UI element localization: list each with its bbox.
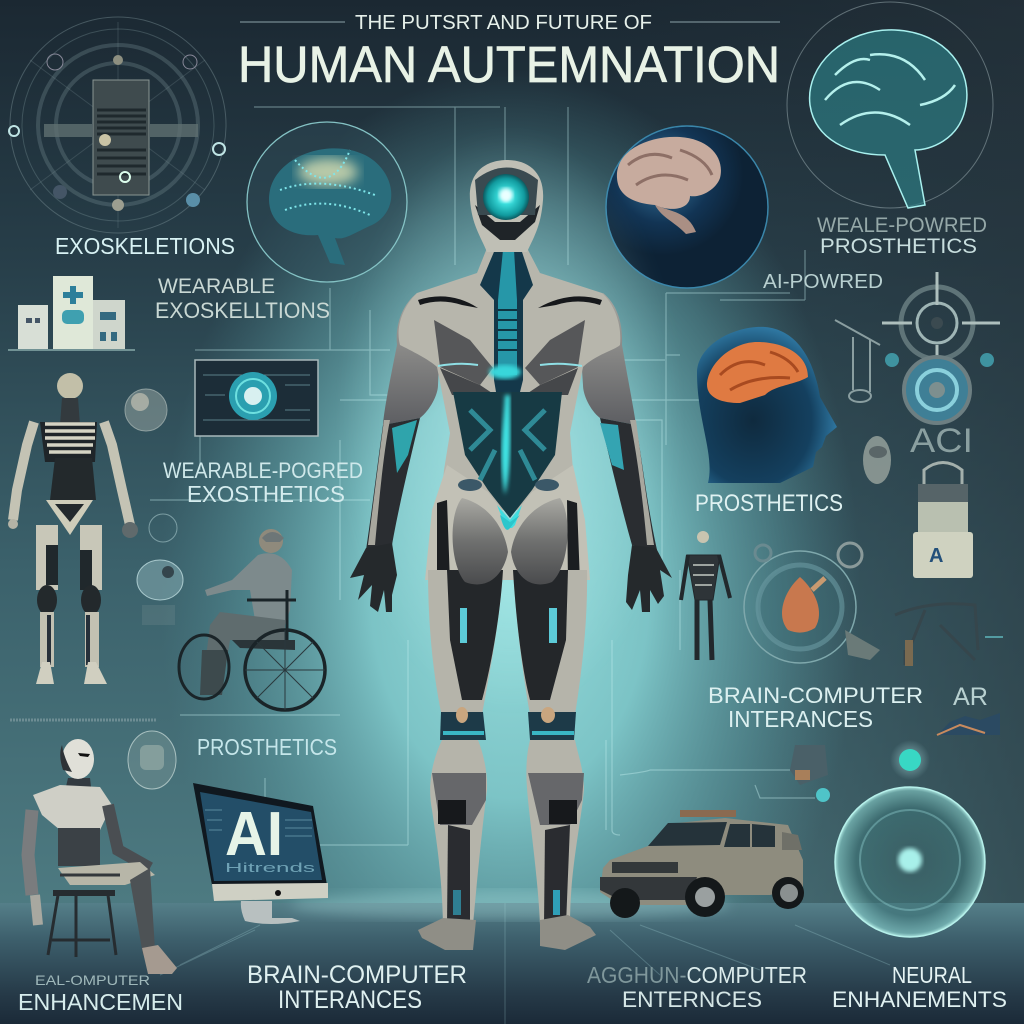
icon: wheelchair user (179, 529, 325, 710)
small figure with dot (790, 745, 830, 802)
arms (383, 293, 440, 425)
icon: small mask (863, 436, 891, 484)
label: brain-computer interfaces right: BRAIN-COMPUTER (708, 683, 923, 708)
icon: AI monitor: Hitrends (225, 860, 316, 875)
lower back mesh (453, 392, 562, 518)
label: weale-powered prosthetics: PROSTHETICS (820, 235, 977, 258)
label: brain-computer interances bottom: BRAIN-COMPUTER (247, 961, 467, 989)
glutes (453, 498, 508, 584)
icon: gears (882, 272, 1000, 423)
label: neural enhanements (832, 962, 1007, 1012)
label: brain-computer interances bottom: INTERANCES (278, 986, 422, 1014)
label: prosthetics left: PROSTHETICS (197, 734, 337, 760)
label: agghun-computer enternces (587, 962, 807, 1012)
icon: seated robot (28, 739, 177, 974)
label: agghun-computer enternces: ENTERNCES (622, 987, 762, 1012)
thighs (428, 570, 503, 717)
title: THE PUTSRT AND FUTURE OF (355, 12, 652, 34)
label: weale-powered prosthetics: WEALE-POWRED (817, 214, 987, 237)
label: AI-powred: AI-POWRED (763, 271, 883, 293)
label: neural enhanements: NEURAL (892, 962, 972, 988)
label: brain-computer interfaces right: INTERANCES (728, 706, 873, 732)
icon: small devices left (137, 514, 183, 625)
label: wearable exoskeletions (155, 275, 330, 323)
label: eal-omputer enhancements: EAL-OMPUTER (35, 972, 150, 988)
title: HUMAN AUTEMNATION (238, 36, 780, 93)
calves (430, 740, 487, 925)
icon: glowing dot (890, 740, 930, 780)
label: wearable-pogred exosthetics: WEARABLE-POGRED (163, 458, 363, 483)
icon: AI monitor: AI (225, 800, 283, 869)
spine panel (480, 240, 533, 392)
floor (0, 891, 1024, 1024)
icon: anatomical brain sphere (606, 126, 768, 288)
icon: machinery right (880, 604, 1003, 666)
hands (350, 543, 397, 612)
label: brain-computer interfaces right (708, 683, 923, 732)
label: wearable-pogred exosthetics (163, 458, 363, 507)
label: AR: AR (953, 683, 988, 711)
knees (440, 712, 486, 740)
icon: head with orange brain (697, 327, 837, 483)
icon: skeleton figure (8, 373, 138, 684)
label: eal-omputer enhancements: ENHANCEMEN (18, 989, 183, 1015)
icon: exoskeleton radial device (9, 17, 226, 233)
head (470, 160, 543, 252)
label: brain-computer interances bottom (247, 961, 467, 1014)
label: wearable exoskeletions: WEARABLE (158, 275, 275, 298)
icon: capsule head (128, 731, 176, 789)
icon: AR chart device (937, 713, 1000, 735)
icon: stylus tool (835, 320, 880, 402)
icon: hospital (8, 276, 135, 350)
label: wearable-pogred exosthetics: EXOSTHETICS (187, 481, 345, 507)
icon: tiny skeleton (681, 531, 730, 660)
label: eal-omputer enhancements (18, 972, 183, 1015)
label: agghun-computer enternces: AGGHUN-COMPUTER (587, 962, 807, 988)
icon: digital brain sphere (247, 122, 407, 282)
icon: small capsule (125, 389, 167, 431)
central figure (340, 130, 680, 950)
icon: holographic brain top right (787, 2, 993, 208)
label: ACI: ACI (910, 422, 973, 460)
label: exoskeletions: EXOSKELETIONS (55, 233, 235, 259)
icon: circular device with heart (744, 543, 880, 663)
torso (399, 248, 620, 510)
icon: car (600, 810, 804, 918)
icon: padlock A (913, 462, 973, 578)
title (238, 12, 780, 93)
label: prosthetics right: PROSTHETICS (695, 490, 843, 517)
icon: padlock A: A (929, 545, 943, 567)
decorative micro text line (10, 718, 157, 722)
label: neural enhanements: ENHANEMENTS (832, 987, 1007, 1012)
label: wearable exoskeletions: EXOSKELLTIONS (155, 298, 330, 323)
label: weale-powered prosthetics (817, 214, 987, 258)
hips (425, 465, 590, 580)
icon: holographic orb (835, 787, 985, 937)
icon: AI monitor (193, 783, 328, 924)
icon: spiral screen (195, 360, 318, 436)
feet (418, 918, 476, 950)
circuit lines (150, 107, 815, 845)
